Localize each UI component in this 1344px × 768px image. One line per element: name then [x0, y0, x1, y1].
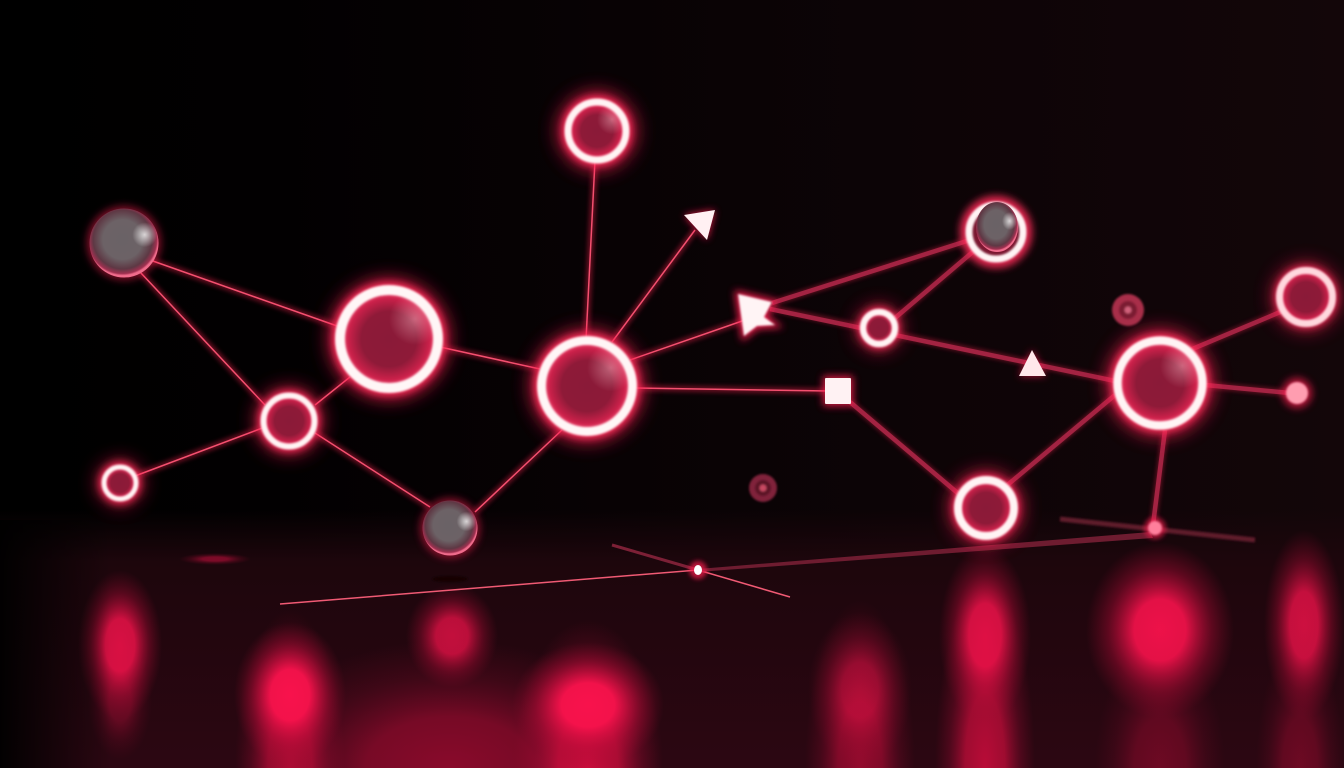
ground line right [698, 532, 1153, 572]
node: hub [1113, 336, 1207, 430]
reflection column: hub [1095, 640, 1225, 768]
reflection: left [78, 570, 162, 720]
reflection: dim spot [179, 553, 251, 565]
reflection wash: centre left [240, 640, 660, 768]
node: small left [260, 392, 318, 450]
triangle: right link [1019, 350, 1046, 376]
ground lines [280, 519, 1255, 604]
node: faint ring lower [749, 474, 777, 502]
sphere shadow on floor [432, 576, 468, 582]
thick links right [770, 240, 1290, 525]
sphere: bottom [420, 498, 480, 558]
thin links left [135, 160, 830, 512]
reflection column: right [1256, 640, 1344, 768]
node: faint ring upper [1112, 294, 1144, 326]
reflection: large node 1 [234, 622, 346, 768]
reflection: bottom node [939, 545, 1031, 725]
reflection: large node 2 [512, 642, 664, 768]
node: far left [101, 464, 139, 502]
node: far right [1277, 268, 1335, 326]
reflection: left lower [88, 640, 152, 760]
reflection: centre right [808, 612, 912, 768]
ground junction right [1144, 517, 1166, 539]
reflection column: large node 2 [513, 620, 663, 768]
node: right mid small [860, 309, 898, 347]
reflection: right [1264, 530, 1344, 720]
ground line left [280, 570, 790, 604]
reflection: sphere [406, 584, 498, 688]
connector lines [135, 160, 1290, 525]
triangle: upper arrow [684, 210, 715, 240]
reflection column: centre right [805, 600, 915, 768]
node: small right dot [1282, 378, 1312, 408]
reflection column: bottom node [935, 580, 1035, 768]
node: large centre [537, 336, 637, 436]
floor reflections [78, 530, 1344, 768]
arrowhead: central [738, 294, 775, 336]
ground line far right [1060, 519, 1255, 540]
square node [825, 378, 851, 404]
reflection: hub [1086, 542, 1234, 718]
reflection column: large node 1 [235, 610, 345, 768]
sphere: left [87, 206, 161, 280]
node: bottom right [955, 477, 1017, 539]
node: top circle [563, 97, 631, 165]
sphere ring: upper right [966, 202, 1026, 262]
floor [0, 510, 1344, 768]
ground line dusky stub [612, 545, 698, 570]
ground junction left [689, 561, 707, 579]
connector glow [135, 160, 1290, 525]
node: large left [335, 285, 443, 393]
left floor shadow [0, 520, 110, 768]
